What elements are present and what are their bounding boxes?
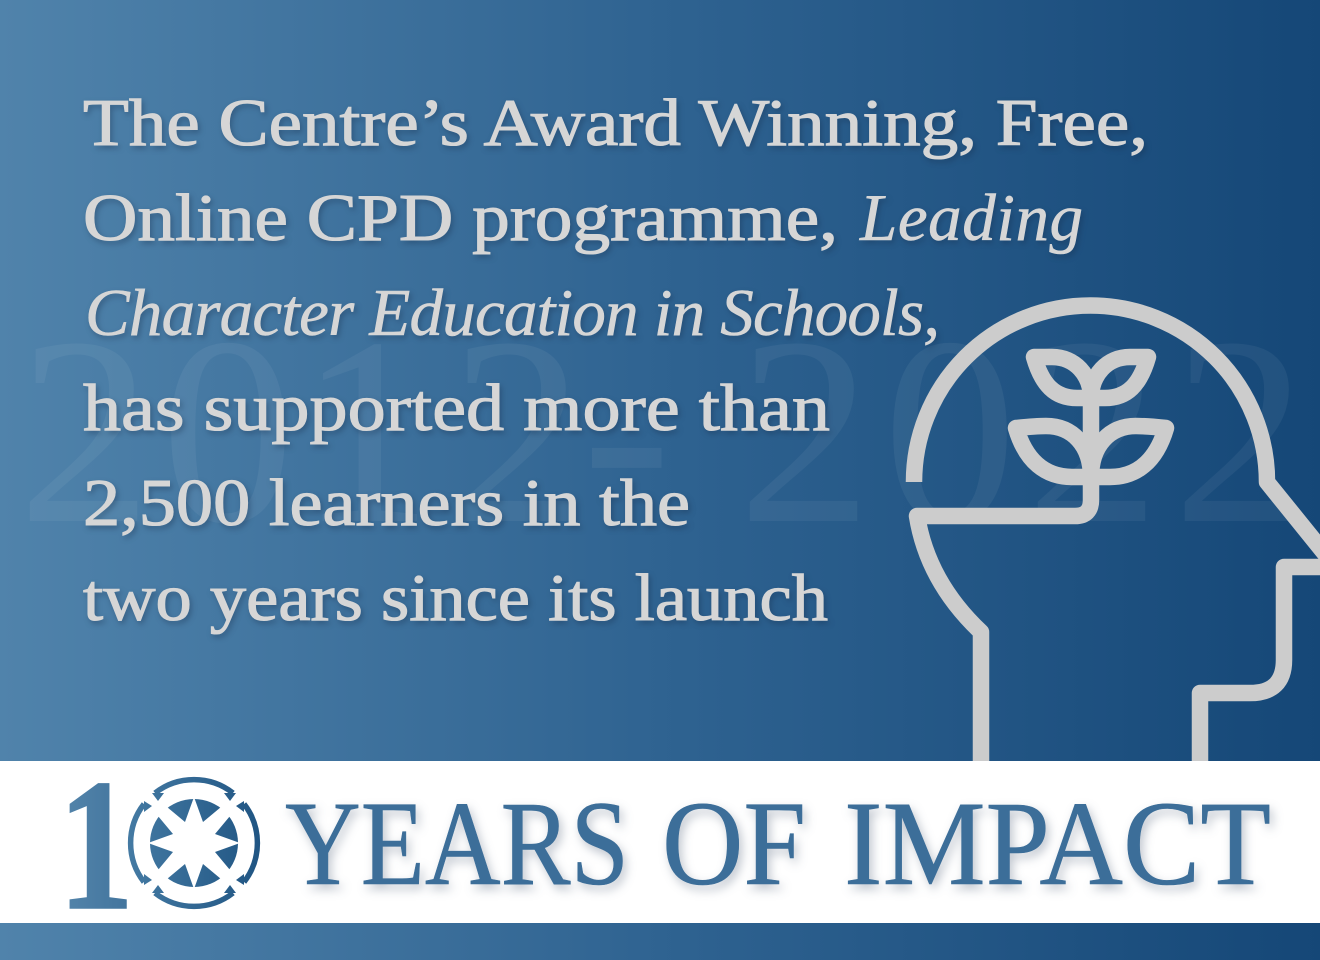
face and chin [1200, 567, 1320, 762]
compass star [148, 797, 240, 889]
line 1: The Centre’s Award Winning, Free, [83, 86, 1148, 160]
numeral one: 1 [58, 740, 134, 949]
compass ring [131, 780, 257, 906]
banner background [0, 761, 1320, 923]
ring end flares [144, 793, 244, 893]
compass disk [150, 799, 238, 887]
word: impact: IMPACT [844, 777, 1271, 911]
main statement text [83, 86, 1148, 635]
word: years: YEARS [285, 777, 629, 911]
line 5: 2,500 learners in the [83, 466, 690, 540]
head outline [914, 306, 1320, 560]
line 3 italic: Character Education in Schools, [85, 276, 940, 350]
icon: head with sprouting plant [914, 306, 1320, 762]
watermark years: 2012-2022 [18, 282, 1307, 579]
white banner [0, 740, 1320, 949]
banner title [285, 777, 1271, 911]
lower left leaf [1016, 426, 1091, 477]
line 2: Online CPD programme, [83, 181, 838, 255]
word: of: OF [662, 777, 806, 911]
line 6: two years since its launch [83, 561, 828, 635]
line 4: has supported more than [83, 371, 830, 445]
icon: compass logo [131, 780, 257, 906]
upper right leaf [1091, 357, 1148, 398]
neck and back of head [917, 398, 1091, 762]
line 2 italic: Leading [859, 181, 1083, 255]
lower right leaf [1091, 426, 1166, 477]
upper left leaf [1034, 357, 1091, 398]
